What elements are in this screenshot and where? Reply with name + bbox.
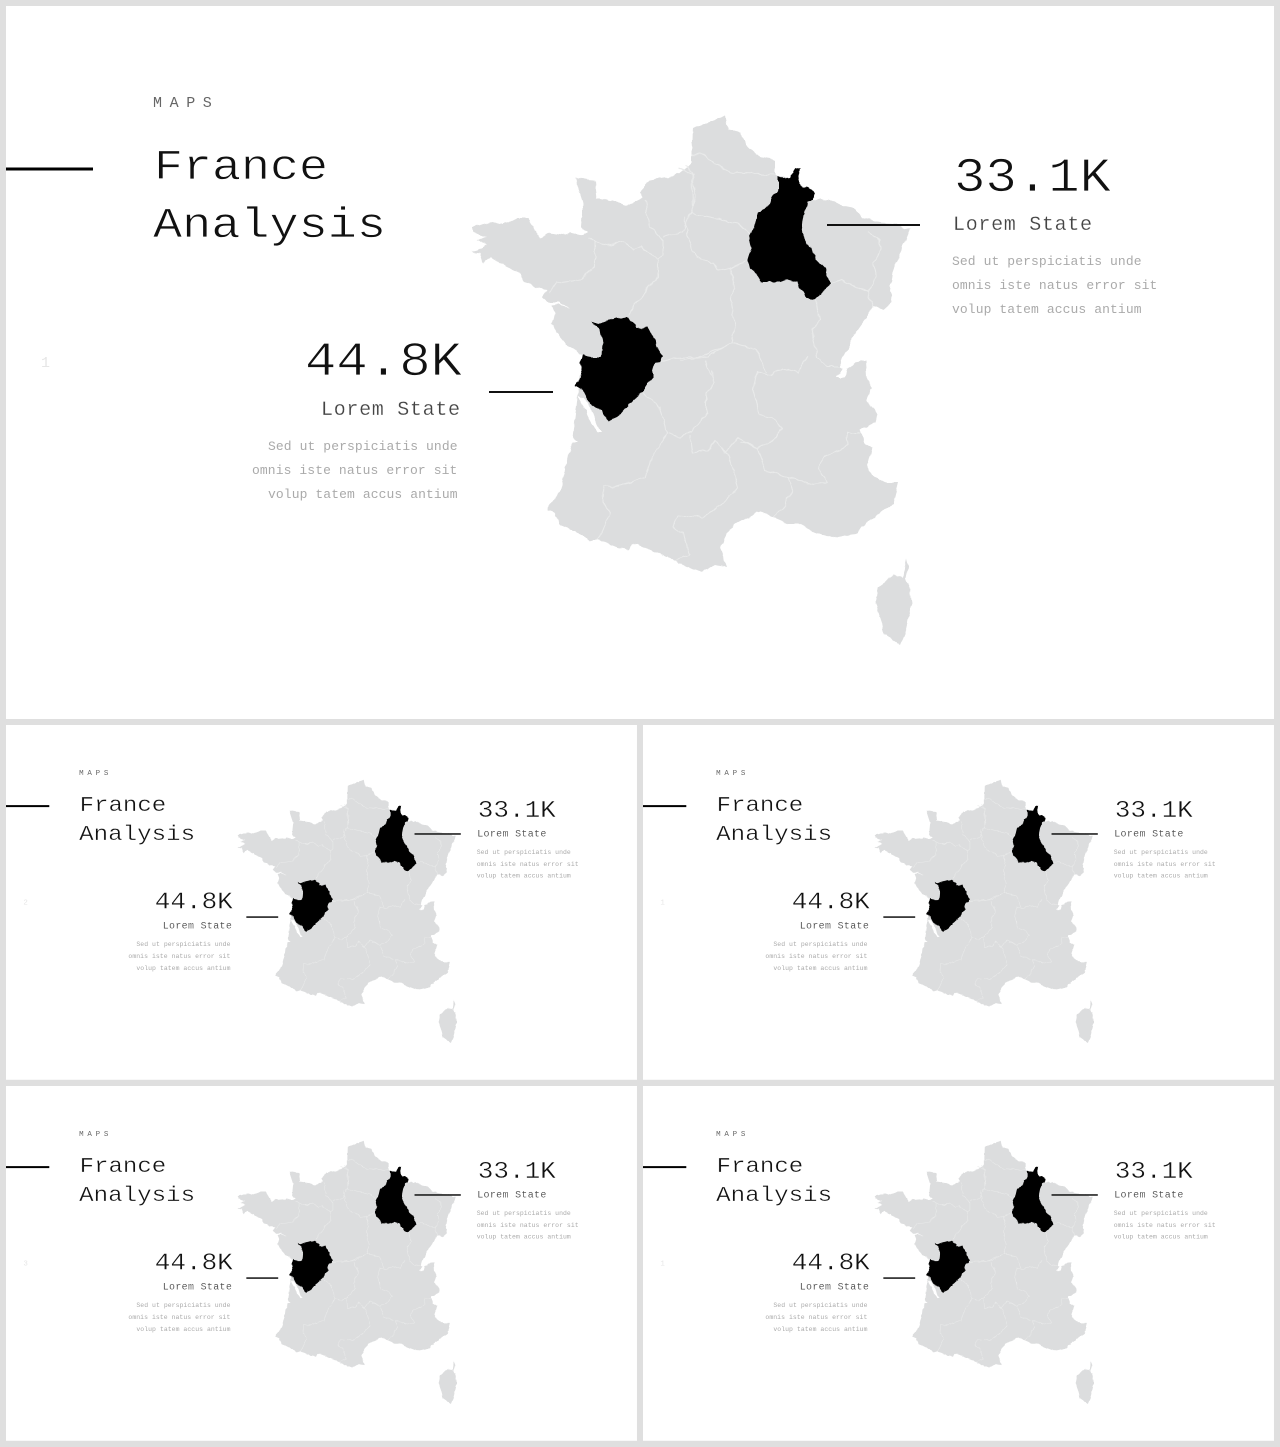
map of France: [472, 116, 912, 645]
callout: east region: volup tatem accus antium: [952, 302, 1142, 317]
panel: thumbnail top right: France: [717, 794, 803, 818]
panel: thumbnail bottom left: Analysis: [79, 1184, 195, 1208]
callout: west region: [252, 336, 462, 502]
panel: thumbnail top left: France: [80, 794, 166, 818]
panel: thumbnail bottom left: MAPS: [79, 1131, 112, 1139]
callout: west region connector: [489, 391, 553, 393]
panel: thumbnail bottom right: France: [717, 1155, 803, 1179]
panel: thumbnail bottom right: volup tatem accus antium: [773, 1326, 868, 1333]
callout: east region: 33.1K: [954, 152, 1111, 206]
panel: thumbnail bottom left: France: [80, 1155, 166, 1179]
panel: thumbnail bottom right: Lorem State: [1114, 1189, 1184, 1200]
callout: east region: Sed ut perspiciatis unde: [952, 254, 1142, 269]
page number: 1: [41, 355, 50, 372]
panel: thumbnail top right: Sed ut perspiciatis unde: [1114, 849, 1208, 856]
panel: thumbnail bottom left: [6, 1086, 637, 1441]
panel: thumbnail bottom left: 44.8K: [155, 1251, 234, 1278]
panel: thumbnail top left: Lorem State: [163, 921, 232, 932]
panel: main slide: [6, 6, 1274, 719]
panel: thumbnail top right: 33.1K: [1115, 798, 1194, 825]
callout: west region: 44.8K: [305, 336, 462, 390]
panel: thumbnail bottom left: volup tatem accus antium: [136, 1326, 231, 1333]
panel: thumbnail bottom right: MAPS: [716, 1131, 749, 1139]
panel: thumbnail bottom right: Sed ut perspiciatis unde: [773, 1302, 868, 1309]
panel: thumbnail top left: Sed ut perspiciatis unde: [477, 849, 571, 856]
panel: thumbnail top left: [6, 725, 637, 1080]
panel: thumbnail top left: MAPS: [79, 770, 112, 778]
panel: thumbnail top left: 2: [23, 900, 28, 908]
callout: east region: [952, 152, 1157, 317]
panel: thumbnail top left: Lorem State: [477, 828, 547, 839]
panel: thumbnail top right: volup tatem accus antium: [1114, 873, 1208, 880]
title accent line: [6, 168, 93, 170]
panel: thumbnail top left: omnis iste natus error sit: [477, 861, 579, 868]
panel: thumbnail top right: [643, 725, 1274, 1080]
panel: thumbnail top right: omnis iste natus error sit: [1114, 861, 1216, 868]
panel: thumbnail top right: 1: [660, 900, 665, 908]
panel: thumbnail bottom right: 44.8K: [792, 1251, 871, 1278]
panel: thumbnail top left: Sed ut perspiciatis unde: [136, 941, 231, 948]
panel: thumbnail top right: Analysis: [716, 823, 832, 847]
title: Analysis: [153, 201, 386, 250]
section label: MAPS: [153, 95, 219, 112]
panel: thumbnail bottom left: Lorem State: [477, 1189, 547, 1200]
callout: east region: omnis iste natus error sit: [952, 278, 1157, 293]
callout: east region: Lorem State: [953, 214, 1093, 237]
callout: west region: volup tatem accus antium: [268, 487, 458, 502]
panel: thumbnail bottom right: 1: [660, 1261, 665, 1269]
title: [153, 143, 386, 250]
panel: thumbnail bottom left: omnis iste natus error sit: [128, 1314, 230, 1321]
panel: thumbnail bottom left: Lorem State: [163, 1282, 232, 1293]
panel: thumbnail top right: volup tatem accus antium: [773, 965, 868, 972]
panel: thumbnail top right: 44.8K: [792, 890, 871, 917]
panel: thumbnail top right: Lorem State: [800, 921, 869, 932]
panel: thumbnail top left: 44.8K: [155, 890, 234, 917]
panel: thumbnail bottom right: omnis iste natus error sit: [1114, 1222, 1216, 1229]
panel: thumbnail top right: MAPS: [716, 770, 749, 778]
panel: thumbnail bottom right: Sed ut perspiciatis unde: [1114, 1210, 1208, 1217]
panel: thumbnail top right: omnis iste natus error sit: [765, 953, 867, 960]
panel: thumbnail top left: volup tatem accus antium: [477, 873, 571, 880]
callout: east region connector: [827, 224, 920, 226]
panel: thumbnail top right: Lorem State: [1114, 828, 1184, 839]
callout: west region: Lorem State: [321, 399, 461, 422]
panel: thumbnail bottom right: Analysis: [716, 1184, 832, 1208]
panel: thumbnail top left: omnis iste natus error sit: [128, 953, 230, 960]
panel: thumbnail bottom left: omnis iste natus error sit: [477, 1222, 579, 1229]
panel: thumbnail bottom left: Sed ut perspiciatis unde: [136, 1302, 231, 1309]
callout: west region: omnis iste natus error sit: [252, 463, 457, 478]
panel: thumbnail bottom right: [643, 1086, 1274, 1441]
panel: thumbnail bottom left: volup tatem accus antium: [477, 1234, 571, 1241]
panel: thumbnail top right: Sed ut perspiciatis unde: [773, 941, 868, 948]
panel: thumbnail bottom right: 33.1K: [1115, 1159, 1194, 1186]
panel: thumbnail bottom right: omnis iste natus error sit: [765, 1314, 867, 1321]
title: France: [154, 143, 328, 192]
callout: west region: Sed ut perspiciatis unde: [268, 439, 458, 454]
panel: thumbnail top left: Analysis: [79, 823, 195, 847]
panel: thumbnail bottom left: 33.1K: [478, 1159, 557, 1186]
panel: thumbnail bottom right: Lorem State: [800, 1282, 869, 1293]
panel: thumbnail top left: 33.1K: [478, 798, 557, 825]
panel: thumbnail bottom right: volup tatem accus antium: [1114, 1234, 1208, 1241]
panel: thumbnail bottom left: Sed ut perspiciatis unde: [477, 1210, 571, 1217]
panel: thumbnail bottom left: 3: [23, 1261, 28, 1269]
panel: thumbnail top left: volup tatem accus antium: [136, 965, 231, 972]
